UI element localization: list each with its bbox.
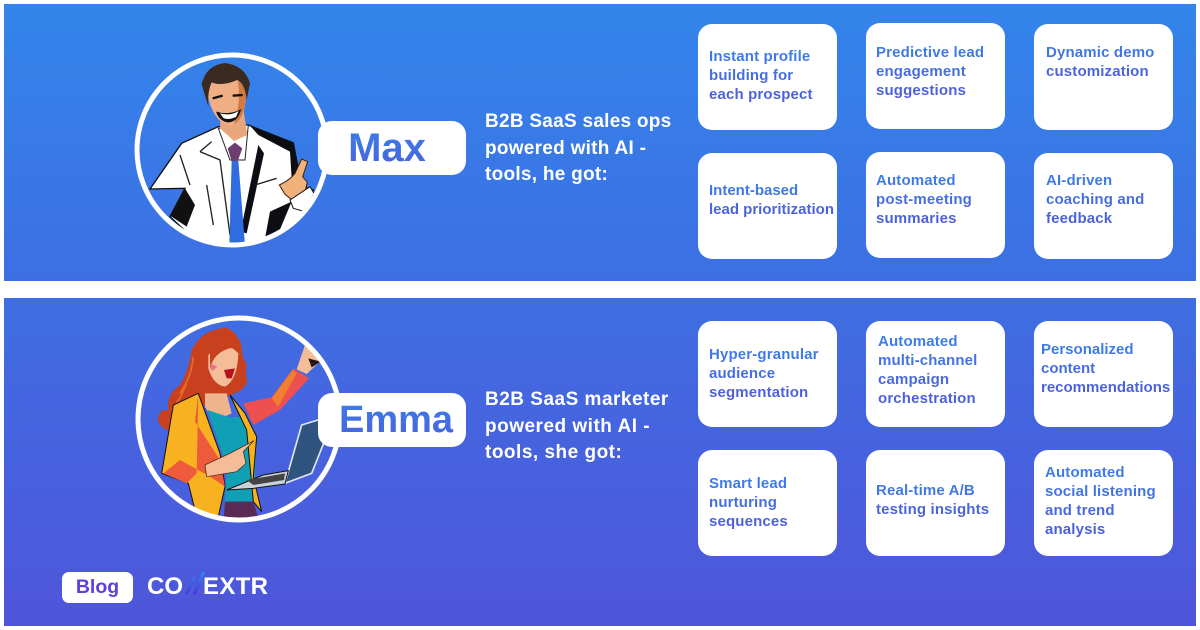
text: Max intro — [485, 111, 672, 185]
logo: CONEXTR — [147, 572, 268, 600]
card: Hyper-granular segmentation: segmentation — [709, 384, 808, 401]
icon: Max portrait — [134, 52, 326, 248]
card: Instant profile building: building for — [709, 67, 793, 84]
text: Emma intro — [485, 389, 669, 463]
card: Predictive lead engagement: Predictive lead — [876, 44, 984, 61]
badge: Blog — [62, 572, 133, 603]
card: Dynamic demo customization: customization — [1046, 63, 1149, 80]
logo: CONEXTR: CO — [147, 573, 183, 600]
card: Automated social listening: Automated — [1045, 464, 1125, 481]
card: Personalized content recommendations: content — [1041, 360, 1095, 377]
card: Predictive lead engagement: engagement — [876, 63, 966, 80]
card: Smart lead nurturing — [698, 450, 837, 556]
card: Personalized content recommendations: recommendations — [1041, 379, 1170, 396]
card: AI-driven coaching: AI-driven — [1046, 172, 1112, 189]
card: Automated multi-channel orchestration: Automated — [878, 333, 958, 350]
card: AI-driven coaching: feedback — [1046, 210, 1112, 227]
card: Automated post-meeting summaries: Automated — [876, 172, 956, 189]
icon: Emma portrait — [136, 316, 340, 522]
card: Predictive lead engagement — [866, 23, 1005, 129]
text: Emma intro: powered with AI - — [485, 416, 650, 436]
label: Emma: Emma — [339, 399, 453, 441]
card: Hyper-granular segmentation: Hyper-granular — [709, 346, 819, 363]
card: Automated multi-channel orchestration: campaign — [878, 371, 949, 388]
card: Smart lead nurturing: nurturing — [709, 494, 777, 511]
card: Hyper-granular segmentation — [698, 321, 837, 427]
card: Intent-based lead prioritization: Intent-based — [709, 182, 798, 199]
label: Max: Max — [348, 126, 426, 170]
card: Automated multi-channel orchestration: orchestration — [878, 390, 976, 407]
card: Smart lead nurturing: sequences — [709, 513, 788, 530]
card: Automated social listening — [1034, 450, 1173, 556]
text: Emma intro: B2B SaaS marketer — [485, 389, 669, 410]
card: Automated post-meeting summaries: summaries — [876, 210, 957, 227]
card: AI-driven coaching — [1034, 153, 1173, 259]
card: Automated social listening: analysis — [1045, 521, 1105, 538]
card: Instant profile building: Instant profile — [709, 48, 810, 65]
card: Automated social listening: social listening — [1045, 483, 1156, 500]
card: Automated multi-channel orchestration — [866, 321, 1005, 427]
card: Real-time A/B testing: testing insights — [876, 501, 989, 518]
card: Dynamic demo customization — [1034, 24, 1173, 130]
logo: CONEXTR: EXTR — [203, 573, 268, 600]
card: Real-time A/B testing: Real-time A/B — [876, 482, 975, 499]
panel: Max background — [4, 4, 1196, 281]
label: Max — [318, 121, 466, 175]
text: Emma intro: tools, she got: — [485, 442, 622, 463]
card: Smart lead nurturing: Smart lead — [709, 475, 787, 492]
card: Automated post-meeting summaries: post-meeting — [876, 191, 972, 208]
text: Max intro: B2B SaaS sales ops — [485, 111, 672, 132]
text: Max intro: tools, he got: — [485, 164, 608, 185]
card: Instant profile building — [698, 24, 837, 130]
card: Predictive lead engagement: suggestions — [876, 82, 966, 99]
panel: Emma background — [4, 298, 1196, 626]
card: Automated multi-channel orchestration: multi-channel — [878, 352, 977, 369]
card: Instant profile building: each prospect — [709, 86, 813, 103]
label: Emma — [318, 393, 466, 447]
text: Max intro: powered with AI - — [485, 138, 646, 158]
badge: Blog: Blog — [76, 576, 119, 598]
card: Personalized content recommendations — [1034, 321, 1173, 427]
card: Intent-based lead prioritization: lead prioritization — [709, 201, 834, 218]
card: Automated social listening: and trend — [1045, 502, 1115, 519]
card: Real-time A/B testing — [866, 450, 1005, 556]
card: Personalized content recommendations: Personalized — [1041, 341, 1134, 358]
card: AI-driven coaching: coaching and — [1046, 191, 1144, 208]
card: Hyper-granular segmentation: audience — [709, 365, 775, 382]
card: Dynamic demo customization: Dynamic demo — [1046, 44, 1154, 61]
card: Automated post-meeting summaries — [866, 152, 1005, 258]
card: Intent-based lead prioritization — [698, 153, 837, 259]
